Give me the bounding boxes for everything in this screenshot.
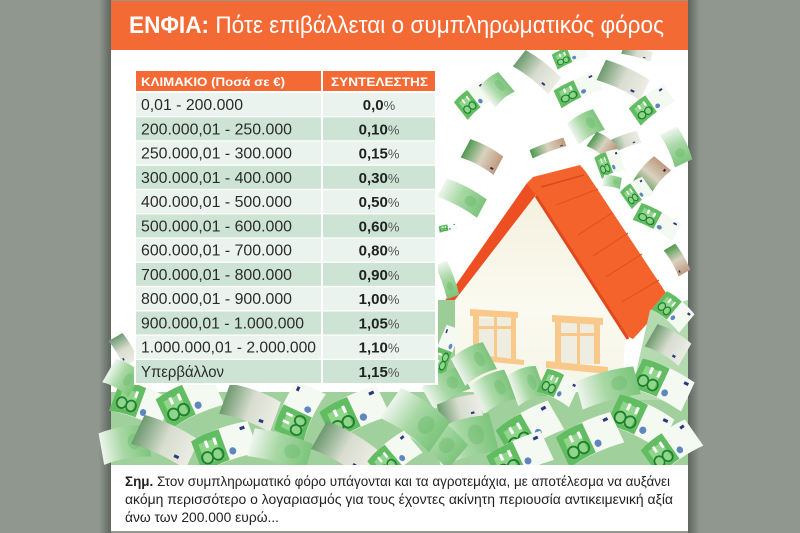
rate values: 1,05% <box>359 316 400 332</box>
rate values: 1,00% <box>359 291 400 308</box>
table header: ΣΥΝΤΕΛΕΣΤΗΣ <box>331 75 428 89</box>
footnote <box>111 465 688 531</box>
house walls <box>455 190 625 420</box>
bracket labels <box>141 97 316 381</box>
table row backgrounds <box>136 93 435 383</box>
footnote: ακόμη περισσότερο ο λογαριασμός για τους έχοντες ακίνητη περιουσία αντικειμενική αξία <box>125 492 673 507</box>
illustration: house <box>437 165 670 420</box>
right window <box>546 315 608 374</box>
bracket labels: 500.000,01 - 600.000 <box>141 218 292 235</box>
bracket labels: 800.000,01 - 900.000 <box>141 291 292 308</box>
bracket labels: 0,01 - 200.000 <box>141 97 243 114</box>
rate values: 0,60% <box>359 218 400 235</box>
rate values: 0,30% <box>359 170 400 187</box>
illustration: banknote pile <box>98 261 703 485</box>
rate values: 1,10% <box>359 340 400 357</box>
bracket labels: 900.000,01 - 1.000.000 <box>141 316 304 332</box>
bracket labels: Υπερβάλλον <box>141 364 224 381</box>
rate values: 0,10% <box>359 121 400 138</box>
header bar <box>111 1 688 50</box>
bracket labels: 400.000,01 - 500.000 <box>141 194 292 211</box>
footnote: άνω των 200.000 ευρώ... <box>125 510 279 525</box>
left window <box>470 309 524 365</box>
table: tax scale <box>134 69 438 385</box>
illustration: falling banknotes <box>437 41 694 276</box>
footnote: Σημ. Στον συμπληρωματικό φόρο υπάγονται και τα αγροτεμάχια, με αποτέλεσμα να αυξάνει <box>125 474 670 489</box>
rate values: 0,50% <box>359 194 400 211</box>
rate values: 1,15% <box>359 364 400 381</box>
bracket labels: 700.000,01 - 800.000 <box>141 267 292 284</box>
bracket labels: 300.000,01 - 400.000 <box>141 170 292 187</box>
bracket labels: 1.000.000,01 - 2.000.000 <box>141 340 316 357</box>
bracket labels: 600.000,01 - 700.000 <box>141 243 292 260</box>
rate values: 0,0% <box>363 97 396 114</box>
rate values: 0,90% <box>359 267 400 284</box>
house left roof edge <box>437 183 536 323</box>
table header: ΚΛΙΜΑΚΙΟ (Ποσά σε €) <box>141 75 285 89</box>
bracket labels: 250.000,01 - 300.000 <box>141 146 292 162</box>
house right roof <box>527 165 670 339</box>
rate values: 0,15% <box>359 146 400 162</box>
table header <box>136 71 435 91</box>
panel: white card <box>111 1 688 531</box>
rate values <box>359 97 400 381</box>
title: ΕΝΦΙΑ: Πότε επιβάλλεται ο συμπληρωματικός φόρος <box>129 12 664 39</box>
bracket labels: 200.000,01 - 250.000 <box>141 121 292 138</box>
rate values: 0,80% <box>359 243 400 260</box>
